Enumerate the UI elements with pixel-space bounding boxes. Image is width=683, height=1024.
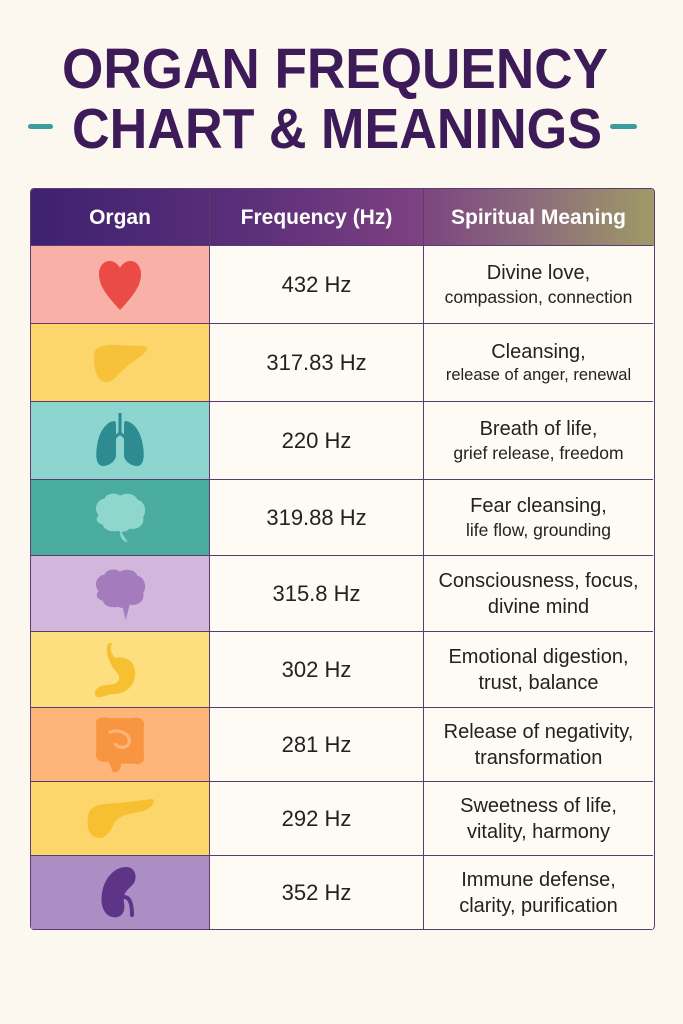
title: CHART & MEANINGS [72, 97, 602, 160]
row: heart: 432 Hz [282, 272, 351, 296]
row: brain purple: Consciousness, focus, [438, 570, 639, 592]
icon: pancreas [31, 782, 210, 855]
icon: heart [31, 246, 210, 323]
row: lungs: 220 Hz [282, 428, 351, 452]
icon: intestines [31, 708, 210, 781]
icon: stomach [31, 632, 210, 707]
row: intestines: 281 Hz [282, 732, 351, 756]
row: liver: Cleansing, [491, 341, 586, 363]
row: kidney: Immune defense, [461, 868, 616, 890]
icon: brain purple [31, 556, 210, 631]
row: brain purple: 315.8 Hz [272, 580, 361, 606]
icon: brain [31, 480, 210, 555]
row: liver: release of anger, renewal [446, 366, 631, 384]
icon: kidney [31, 856, 210, 929]
row: liver [31, 323, 653, 401]
row: pancreas: vitality, harmony [467, 820, 610, 842]
row: heart [31, 245, 653, 323]
row: brain teal: 319.88 Hz [266, 504, 367, 530]
icon: lungs [31, 402, 210, 479]
row: heart: compassion, connection [445, 287, 632, 307]
row: brain purple: divine mind [488, 596, 589, 618]
row: stomach: Emotional digestion, [448, 646, 629, 668]
icon: liver [31, 324, 210, 401]
row: brain teal: life flow, grounding [466, 520, 611, 540]
row: stomach: trust, balance [478, 672, 599, 694]
row: stomach [31, 631, 653, 707]
row: pancreas: 292 Hz [282, 806, 351, 830]
row: lungs: Breath of life, [480, 418, 597, 440]
header row: Spiritual Meaning [451, 206, 626, 229]
table [30, 188, 655, 930]
header row: Frequency (Hz) [241, 206, 392, 229]
header row: Organ [89, 206, 151, 229]
row: pancreas: Sweetness of life, [460, 794, 617, 816]
title: ORGAN FREQUENCY [62, 37, 608, 101]
row: kidney [31, 855, 653, 929]
row: heart: Divine love, [487, 262, 590, 284]
row: liver: 317.83 Hz [266, 350, 367, 374]
row: brain teal: Fear cleansing, [470, 495, 607, 517]
row: pancreas [31, 781, 653, 855]
row: lungs: grief release, freedom [453, 443, 624, 463]
row: brain purple [31, 555, 653, 631]
row: brain teal [31, 479, 653, 555]
row: stomach: 302 Hz [282, 656, 351, 682]
header row [31, 189, 654, 246]
row: intestines: transformation [475, 746, 602, 768]
row: kidney: clarity, purification [459, 894, 618, 916]
row: kidney: 352 Hz [282, 880, 351, 904]
title [28, 37, 637, 160]
row: lungs [31, 401, 653, 479]
row: intestines: Release of negativity, [444, 720, 633, 742]
row: intestines [31, 707, 653, 781]
